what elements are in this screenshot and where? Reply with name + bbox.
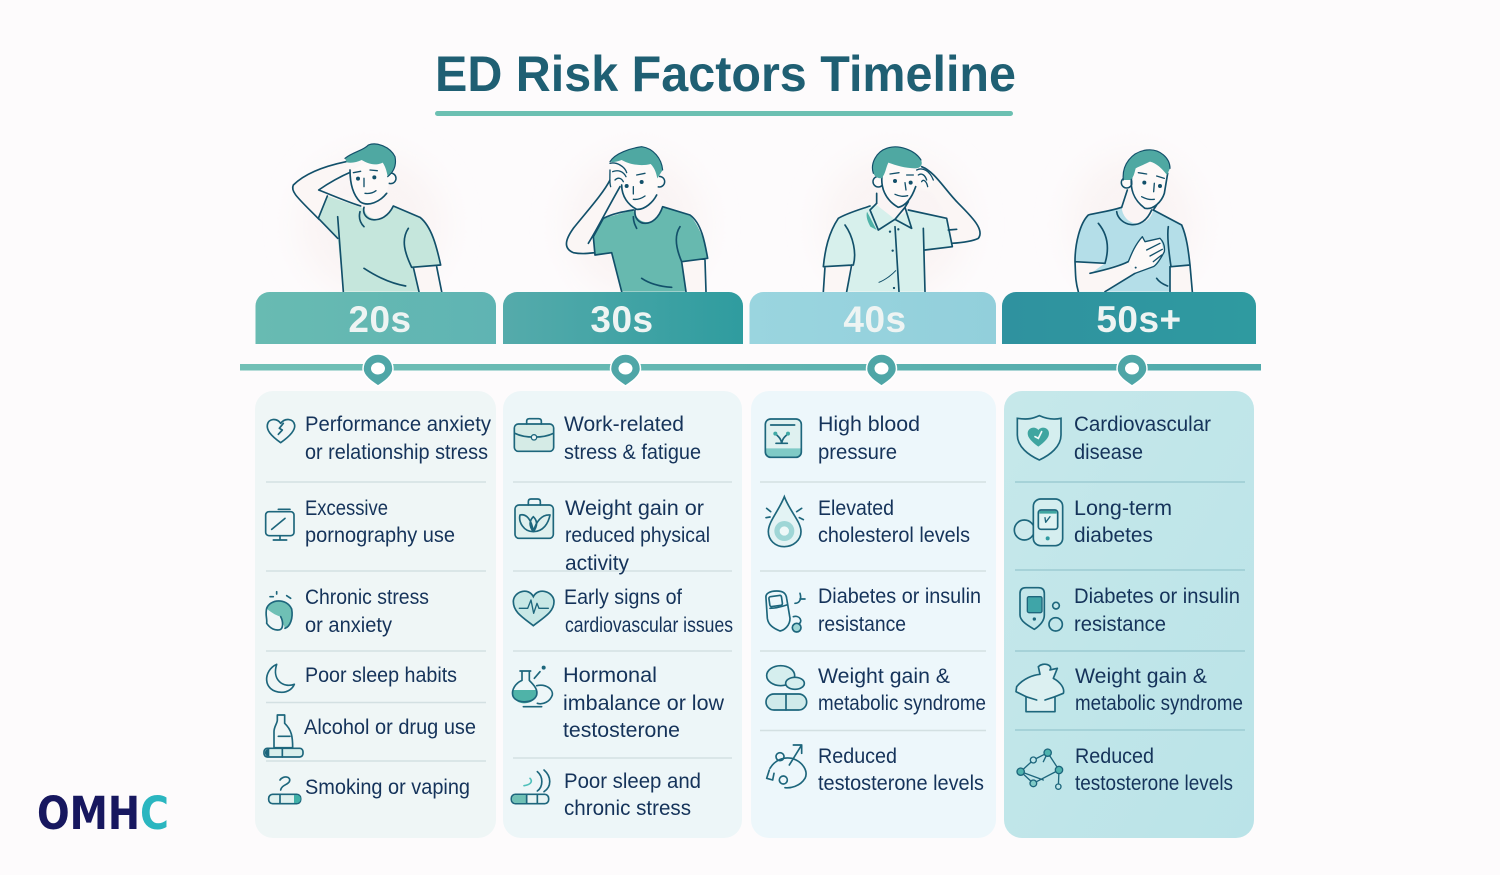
- title: ED Risk Factors Timeline: [435, 46, 1016, 102]
- age band: 50s+: [1002, 292, 1256, 344]
- text: long-term diabetes: diabetes: [1074, 523, 1153, 547]
- text: pornography use: Excessive: [305, 496, 388, 520]
- text: pornography use: [305, 496, 455, 547]
- icon: briefcase: [514, 419, 554, 451]
- text: chronic stress: or anxiety: [305, 613, 392, 637]
- panel: 20s risk factors: [255, 391, 496, 838]
- text: cardiovascular disease: Cardiovascular: [1074, 412, 1211, 436]
- text: poor sleep and stress: [564, 769, 701, 820]
- icon: stones and capsule: [766, 666, 807, 710]
- text: reduced testosterone: [1075, 744, 1233, 795]
- icon: bottle: [264, 715, 303, 757]
- icon: droplet: [766, 497, 803, 547]
- text: weight gain and metabolic syndrome: [1075, 664, 1243, 715]
- text: diabetes or insulin resistance: [1074, 584, 1240, 636]
- figure: man in his 40s: [823, 147, 980, 292]
- text: cardiovascular disease: disease: [1074, 440, 1143, 464]
- text: early cardiovascular signs: Early signs of: [564, 585, 682, 609]
- text: weight gain and metabolic syndrome: metabolic syndrome: [1075, 691, 1243, 715]
- text: weight gain and metabolic syndrome: Weight gain &: [1075, 664, 1207, 688]
- text: long-term diabetes: Long-term: [1074, 496, 1172, 520]
- text: weight gain: reduced physical: [565, 523, 710, 547]
- panel: 30s risk factors: [503, 391, 742, 838]
- text: hormonal imbalance: testosterone: [563, 718, 680, 742]
- logo: OMHC: OMH: [37, 787, 140, 840]
- text: hormonal imbalance: [563, 663, 724, 742]
- icon: monitor: [266, 509, 294, 540]
- figure: man in his 50s and older: [1075, 150, 1192, 292]
- icon: glucose device: [1014, 499, 1063, 546]
- figure: man in his 30s: [566, 147, 708, 292]
- icon: broken heart: [267, 420, 295, 443]
- icon: blood pressure monitor: [765, 419, 801, 457]
- text: hormonal imbalance: imbalance or low: [563, 691, 724, 715]
- icon: shield with heart: [1017, 416, 1061, 460]
- text: poor sleep and stress: Poor sleep and: [564, 769, 701, 793]
- text: reduced testosterone: Reduced: [1075, 744, 1154, 768]
- logo: OMHC: C: [140, 787, 169, 840]
- text: chronic stress: [305, 585, 429, 637]
- text: elevated cholesterol: [818, 496, 970, 547]
- age band: 20s: 20s: [348, 299, 412, 340]
- text: performance anxiety: Performance anxiety: [305, 412, 491, 436]
- text: high blood pressure: pressure: [818, 440, 897, 464]
- text: weight gain: Weight gain or: [565, 496, 704, 520]
- text: reduced testosterone: testosterone levels: [1075, 771, 1233, 795]
- text: reduced testosterone: testosterone levels: [818, 771, 984, 795]
- text: alcohol or drug use: Alcohol or drug use: [304, 715, 476, 739]
- text: chronic stress: Chronic stress: [305, 585, 429, 609]
- icon: crescent moon: [267, 664, 294, 692]
- text: weight gain: activity: [565, 551, 629, 575]
- text: performance anxiety: [305, 412, 491, 464]
- text: early cardiovascular signs: [564, 585, 733, 637]
- text: diabetes or insulin resistance: resistance: [1074, 612, 1166, 636]
- text: diabetes or insulin resistance: Diabetes or insulin: [818, 584, 981, 608]
- icon: flask: [512, 666, 552, 707]
- text: poor sleep and stress: chronic stress: [564, 796, 691, 820]
- age band: 40s: [750, 292, 996, 344]
- text: early cardiovascular signs: cardiovascular issues: [565, 613, 733, 637]
- icon: testosterone symbol: [767, 745, 806, 788]
- text: reduced testosterone: [818, 744, 984, 795]
- text: weight gain and metabolic syndrome: metabolic syndrome: [818, 691, 986, 715]
- text: high blood pressure: High blood: [818, 412, 920, 436]
- icon: stressed head: [266, 592, 292, 630]
- age band: 50s+: 50s+: [1096, 299, 1182, 340]
- icon: sleep waves: [511, 770, 550, 804]
- age band: 40s: 40s: [843, 299, 907, 340]
- text: elevated cholesterol: cholesterol levels: [818, 523, 970, 547]
- text: smoking or vaping: Smoking or vaping: [305, 775, 470, 799]
- figure: man in his 20s: [293, 144, 442, 292]
- text: weight gain and metabolic syndrome: Weight gain &: [818, 664, 950, 688]
- text: diabetes or insulin resistance: Diabetes or insulin: [1074, 584, 1240, 608]
- icon: heart with pulse: [513, 591, 554, 626]
- icon: glucose meter: [766, 591, 805, 632]
- text: work-related stress: stress & fatigue: [564, 440, 701, 464]
- text: pornography use: pornography use: [305, 523, 455, 547]
- text: work-related stress: [564, 412, 701, 464]
- text: diabetes or insulin resistance: [818, 584, 981, 636]
- text: high blood pressure: [818, 412, 920, 464]
- title underline: [435, 111, 1013, 116]
- text: poor sleep habits: Poor sleep habits: [305, 663, 457, 687]
- panel: 40s risk factors: [751, 391, 996, 838]
- text: work-related stress: Work-related: [564, 412, 684, 436]
- age band: 30s: 30s: [590, 299, 654, 340]
- panel: 50s+ risk factors: [1004, 391, 1254, 838]
- icon: molecule network: [1017, 749, 1063, 789]
- text: cardiovascular disease: [1074, 412, 1211, 464]
- age band: 30s: [503, 292, 743, 344]
- text: weight gain: [565, 496, 710, 575]
- text: elevated cholesterol: Elevated: [818, 496, 894, 520]
- text: long-term diabetes: [1074, 496, 1172, 547]
- age band: 20s: [256, 292, 496, 344]
- icon: meter and droplets: [1020, 588, 1062, 631]
- text: diabetes or insulin resistance: resistance: [818, 612, 906, 636]
- text: performance anxiety: or relationship stress: [305, 440, 488, 464]
- timeline: [240, 354, 1261, 386]
- icon: shirt silhouette: [1016, 664, 1064, 712]
- icon: bag with leaves: [515, 499, 553, 538]
- icon: cigarette: [269, 777, 301, 804]
- text: reduced testosterone: Reduced: [818, 744, 897, 768]
- text: weight gain and metabolic syndrome: [818, 664, 986, 715]
- text: hormonal imbalance: Hormonal: [563, 663, 657, 687]
